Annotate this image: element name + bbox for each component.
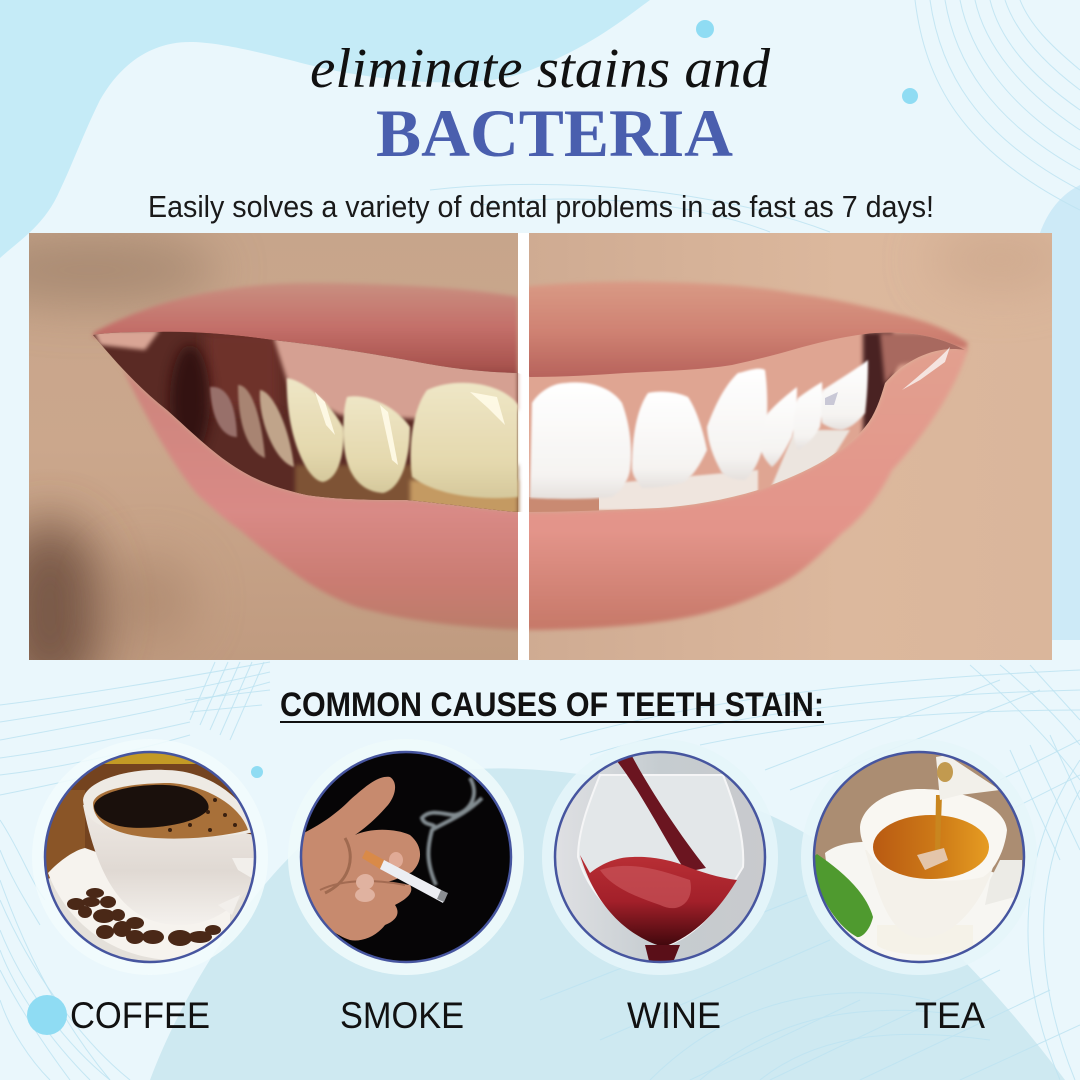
panel: before and after smile photo	[29, 233, 1052, 660]
icon: wine	[542, 739, 778, 975]
title: BACTERIA	[376, 95, 733, 171]
title	[310, 38, 771, 171]
label: smoke: SMOKE	[340, 995, 464, 1036]
lips, left half	[93, 283, 525, 630]
icon: tea	[801, 739, 1037, 975]
gloss on lower lip	[902, 347, 950, 390]
icon: coffee	[32, 739, 268, 975]
lips, right half	[522, 282, 968, 630]
right skin	[529, 230, 1070, 660]
decorative dots	[27, 20, 918, 1035]
subtitle: Easily solves a variety of dental problems in as fast as 7 days!	[148, 189, 934, 224]
label: tea: TEA	[915, 995, 985, 1036]
stained teeth	[210, 387, 237, 437]
label: wine: WINE	[627, 995, 721, 1036]
whitened teeth	[592, 470, 758, 510]
heading: common causes: COMMON CAUSES OF TEETH STAIN:	[280, 686, 824, 724]
label: coffee: COFFEE	[70, 995, 210, 1036]
mouth interior	[90, 325, 974, 520]
title: eliminate stains and	[310, 38, 771, 100]
left skin	[29, 233, 518, 660]
icon: smoke	[288, 739, 524, 975]
